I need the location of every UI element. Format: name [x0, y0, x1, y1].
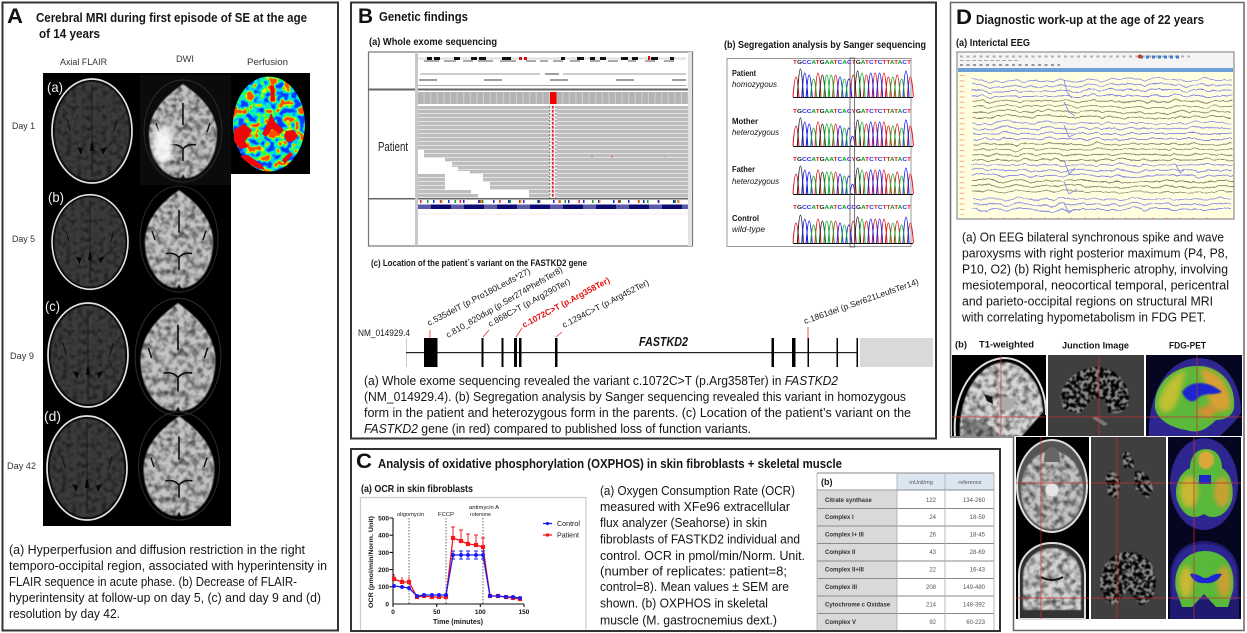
patient series [394, 527, 520, 599]
OCR line chart [360, 498, 586, 630]
panel A: cerebral MRI [2, 2, 338, 630]
caption: panel D: P10, O2) (b) Right hemispheric atrophy, involving [962, 262, 1228, 276]
table rows: 92 [929, 620, 937, 626]
subheading: OCR: (a) OCR in skin fibroblasts [361, 483, 473, 495]
row labels: Day 42 [7, 461, 36, 471]
patient trace [732, 60, 913, 98]
axial and coronal T1 [1016, 437, 1089, 619]
row labels: Day 1 [12, 121, 35, 131]
patient trace: Patient [732, 69, 756, 78]
sagittal T1 [952, 355, 1046, 436]
table rows: Complex III [825, 585, 857, 591]
mother trace: TGCC ATGAATCACYGATCTCTTATACT [793, 109, 912, 115]
gene name: FASTKD2 [639, 335, 688, 349]
patient trace: homozygous [732, 80, 777, 89]
column labels [60, 54, 288, 67]
control series [394, 551, 520, 598]
variant labels: c.1861del (p.Ser621LeufsTer14) [802, 276, 920, 326]
axes: 50 [433, 609, 441, 616]
caption: panel C: shown. (b) OXPHOS in skeletal [600, 596, 768, 610]
event marks [990, 217, 1220, 219]
imaging column labels: (b) [955, 340, 967, 350]
image letters: (c) [45, 298, 60, 314]
image letters: (a) [47, 79, 63, 95]
image letters: (b) [48, 189, 64, 205]
table rows: 208 [926, 585, 937, 591]
row labels: Day 5 [12, 234, 35, 244]
exons [424, 338, 858, 367]
EEG recording [957, 52, 1234, 219]
caption: panel A: resolution by day 42. [9, 606, 120, 621]
table rows: Complex II [825, 550, 856, 556]
imaging column labels: Junction Image [1062, 340, 1129, 350]
mother trace: heterozygous [732, 128, 779, 137]
caption: panel C: muscle (M. gastrocnemius dext.) [600, 612, 777, 628]
table rows: Complex V [825, 620, 856, 626]
imaging column labels: FDG-PET [1169, 340, 1206, 350]
table header [821, 477, 982, 487]
table rows: 134-260 [963, 498, 986, 504]
caption: panel A: FLAIR sequence in acute phase. (b) Decrease of FLAIR- [9, 574, 297, 589]
caption: panel B [364, 373, 911, 436]
axial and coronal FDG-PET [1168, 437, 1241, 619]
row labels [7, 121, 36, 471]
FLAIR day 1 [52, 79, 132, 183]
EEG toolbar [958, 53, 1233, 72]
caption: panel D: with correlating hypometabolism in FDG PET. [961, 310, 1206, 324]
DWI day 5 [140, 186, 218, 292]
table rows: 18-45 [970, 532, 986, 538]
axes: 0 [391, 609, 395, 616]
axes: 300 [378, 550, 389, 557]
axes: OCR (pmol/min/Norm. Unit) [368, 516, 375, 608]
axes: 0 [385, 602, 389, 608]
father trace [732, 157, 913, 194]
heading: panel D: Diagnostic work-up at the age of 22 years [976, 12, 1204, 27]
heading: panel C: Analysis of oxidative phosphorylation (OXPHOS) in skin fibroblasts + skeletal muscle [378, 456, 842, 471]
heading: panel B: Genetic findings [379, 9, 468, 24]
heading: panel A: Cerebral MRI during first episode of SE at the age [36, 10, 307, 25]
legend: Control [557, 521, 580, 528]
row labels: Day 9 [10, 351, 34, 361]
control trace: TGCC ATGAATCACC GATCTCTTATACT [793, 205, 912, 211]
FLAIR day 42 [47, 416, 127, 520]
panel D: diagnostic work-up [950, 2, 1244, 630]
caption: panel A: hyperintensity at follow-up on day 5, (c) and day 9 and (d) [9, 590, 321, 605]
caption: panel C: control=8). Mean values ± SEM are [600, 579, 789, 594]
table rows: Complex I [825, 515, 854, 521]
injection markers [397, 505, 499, 604]
caption: panel A [9, 542, 327, 621]
coverage track [418, 92, 688, 104]
transcript name: NM_014929.4 [358, 328, 410, 339]
FLAIR day 9 [48, 303, 128, 407]
legend [543, 521, 580, 540]
panel letter D: D [956, 6, 972, 29]
variant labels: c.1294C>T (p.Arg452Ter) [560, 277, 651, 330]
subheading: EEG: (a) Interictal EEG [956, 37, 1030, 49]
variant labels: c.810_820dup (p.Ser274PhefsTer8) [444, 264, 564, 340]
MRI image grid [43, 73, 231, 526]
father trace: TGCC ATGAATCACYGATCTCTTATACT [793, 157, 912, 163]
variant labels: c.1072C>T (p.Arg358Ter) [520, 275, 612, 330]
caption: panel B: form in the patient and heterozygous form in the parents. (c) Location of the patient’s variant on the [364, 405, 911, 420]
channel labels [960, 75, 964, 215]
caption: panel D [961, 230, 1229, 324]
aligned reads [418, 106, 688, 198]
EEG traces: blue [972, 80, 1233, 210]
table rows: 26 [929, 532, 937, 538]
panel C: OXPHOS analysis [351, 449, 1000, 631]
panel letter B: B [358, 5, 373, 28]
axes: 150 [519, 609, 530, 616]
table rows: 18-59 [970, 515, 986, 521]
table rows: 43 [929, 550, 937, 556]
table rows: 214 [926, 602, 937, 608]
axes: 100 [378, 584, 389, 591]
subheading: variant location: (c) Location of the patient`s variant on the FASTKD2 gene [371, 258, 587, 269]
imaging column labels [955, 340, 1206, 350]
subheading: segregation analysis: (b) Segregation analysis by Sanger sequencing [724, 39, 926, 51]
heading: panel A: of 14 years [39, 26, 100, 41]
panel letter C: C [356, 450, 372, 473]
axes: 500 [378, 516, 389, 522]
axes: 200 [378, 567, 389, 574]
injection markers: rotenone [470, 512, 491, 518]
legend: Patient [557, 532, 579, 540]
axial and coronal junction image [1091, 437, 1166, 619]
control trace: wild-type [732, 225, 766, 234]
variant labels [425, 264, 920, 340]
mother trace: Mother [732, 117, 758, 126]
variant stems [430, 327, 808, 338]
image letters [44, 79, 64, 424]
caption: panel A: temporo-occipital region, associated with hyperintensity in [9, 558, 327, 573]
caption: panel C: measured with XFe96 extracellular [600, 499, 791, 514]
sagittal junction image [1048, 355, 1144, 436]
table rows: 149-480 [963, 585, 986, 591]
variant labels: c.535delT (p.Pro180Leufs*27) [425, 266, 532, 328]
column labels: Axial FLAIR [60, 57, 107, 67]
control trace [732, 205, 913, 244]
DWI day 9 [135, 298, 221, 416]
subheading: whole exome sequencing: (a) Whole exome sequencing [369, 36, 497, 48]
caption: panel C: flux analyzer (Seahorse) in skin [600, 515, 767, 530]
table rows: Cytochrome c Oxidase [825, 602, 891, 608]
table rows: Complex II+III [825, 568, 864, 574]
heading: panel A [36, 10, 307, 41]
chromosome ideogram [418, 56, 686, 86]
father trace: heterozygous [732, 177, 779, 186]
sagittal FDG-PET [1146, 355, 1242, 436]
injection markers: FCCP [438, 512, 454, 518]
axes: Time (minutes) [433, 619, 483, 626]
caption: panel D: (a) On EEG bilateral synchronous spike and wave [962, 230, 1224, 244]
caption: panel C: fibroblasts of FASTKD2 individual and [600, 532, 800, 546]
table rows: 60-223 [966, 620, 986, 626]
imaging column labels: T1-weighted [979, 340, 1034, 350]
table rows: 24 [929, 515, 937, 521]
caption: panel B: (NM_014929.4). (b) Segregation analysis by Sanger sequencing revealed this variant in homozygous [364, 389, 906, 404]
FLAIR day 5 [52, 195, 128, 289]
table rows [825, 498, 986, 626]
injection markers: oligomycin [397, 512, 424, 518]
caption: panel C: control. OCR in pmol/min/Norm. Unit. [600, 548, 805, 563]
Sanger chromatograms [727, 58, 913, 247]
table header: (b) [821, 477, 832, 487]
spike-wave discharges [1064, 80, 1184, 213]
caption: panel C [600, 483, 805, 628]
caption: panel D: paroxysms with right posterior maximum (P4, P8, [962, 246, 1228, 260]
panel letter A: A [7, 5, 23, 28]
axes: 400 [378, 532, 389, 540]
column labels: Perfusion [247, 57, 288, 67]
caption: panel C: (number of replicates: patient=8; [600, 564, 787, 578]
table rows: 28-69 [970, 550, 986, 556]
IGV read viewer [368, 52, 693, 246]
FASTKD2 gene diagram [358, 264, 933, 367]
control trace: Control [732, 214, 759, 223]
injection markers: antimycin A [469, 505, 499, 511]
table rows: 22 [929, 568, 937, 574]
panel B: genetic findings [351, 2, 936, 438]
table rows: 148-392 [963, 602, 986, 608]
OXPHOS table [817, 473, 994, 630]
EEG traces: grey [972, 101, 1233, 192]
caption: panel B: (a) Whole exome sequencing revealed the variant c.1072C>T (p.Arg358Ter) in FASTKD2 [364, 373, 839, 388]
table rows: 122 [926, 498, 937, 504]
caption: panel C: (a) Oxygen Consumption Rate (OCR) [600, 483, 795, 498]
caption: panel D: and parieto-occipital regions on structural MRI [962, 294, 1213, 308]
caption: panel A: (a) Hyperperfusion and diffusion restriction in the right [9, 542, 305, 557]
DWI day 1 [144, 80, 222, 182]
table rows: 16-43 [970, 568, 986, 574]
column labels: DWI [176, 54, 194, 64]
father trace: Father [732, 165, 755, 174]
table header: reference [958, 480, 982, 486]
caption: panel D: mesiotemporal, neocortical temporal, pericentral [962, 278, 1229, 292]
table rows: Complex I+ III [825, 532, 864, 538]
mother trace [732, 109, 913, 146]
caption: panel B: FASTKD2 gene (in red) compared to published loss of function variants. [364, 421, 751, 436]
reference sequence track [418, 202, 688, 214]
table rows: Citrate synthase [825, 498, 872, 504]
variant labels: c.868C>T (p.Arg290Ter) [486, 276, 572, 329]
table header: mUnit/mg [909, 480, 933, 486]
image letters: (d) [44, 408, 61, 424]
perfusion map [231, 73, 310, 174]
patient label: Patient [378, 139, 408, 154]
patient trace: TGCC ATGAATCACTGATCTCTTATACT [793, 60, 912, 66]
axes [368, 516, 530, 626]
axes: 100 [475, 609, 486, 616]
DWI day 42 [138, 412, 220, 520]
